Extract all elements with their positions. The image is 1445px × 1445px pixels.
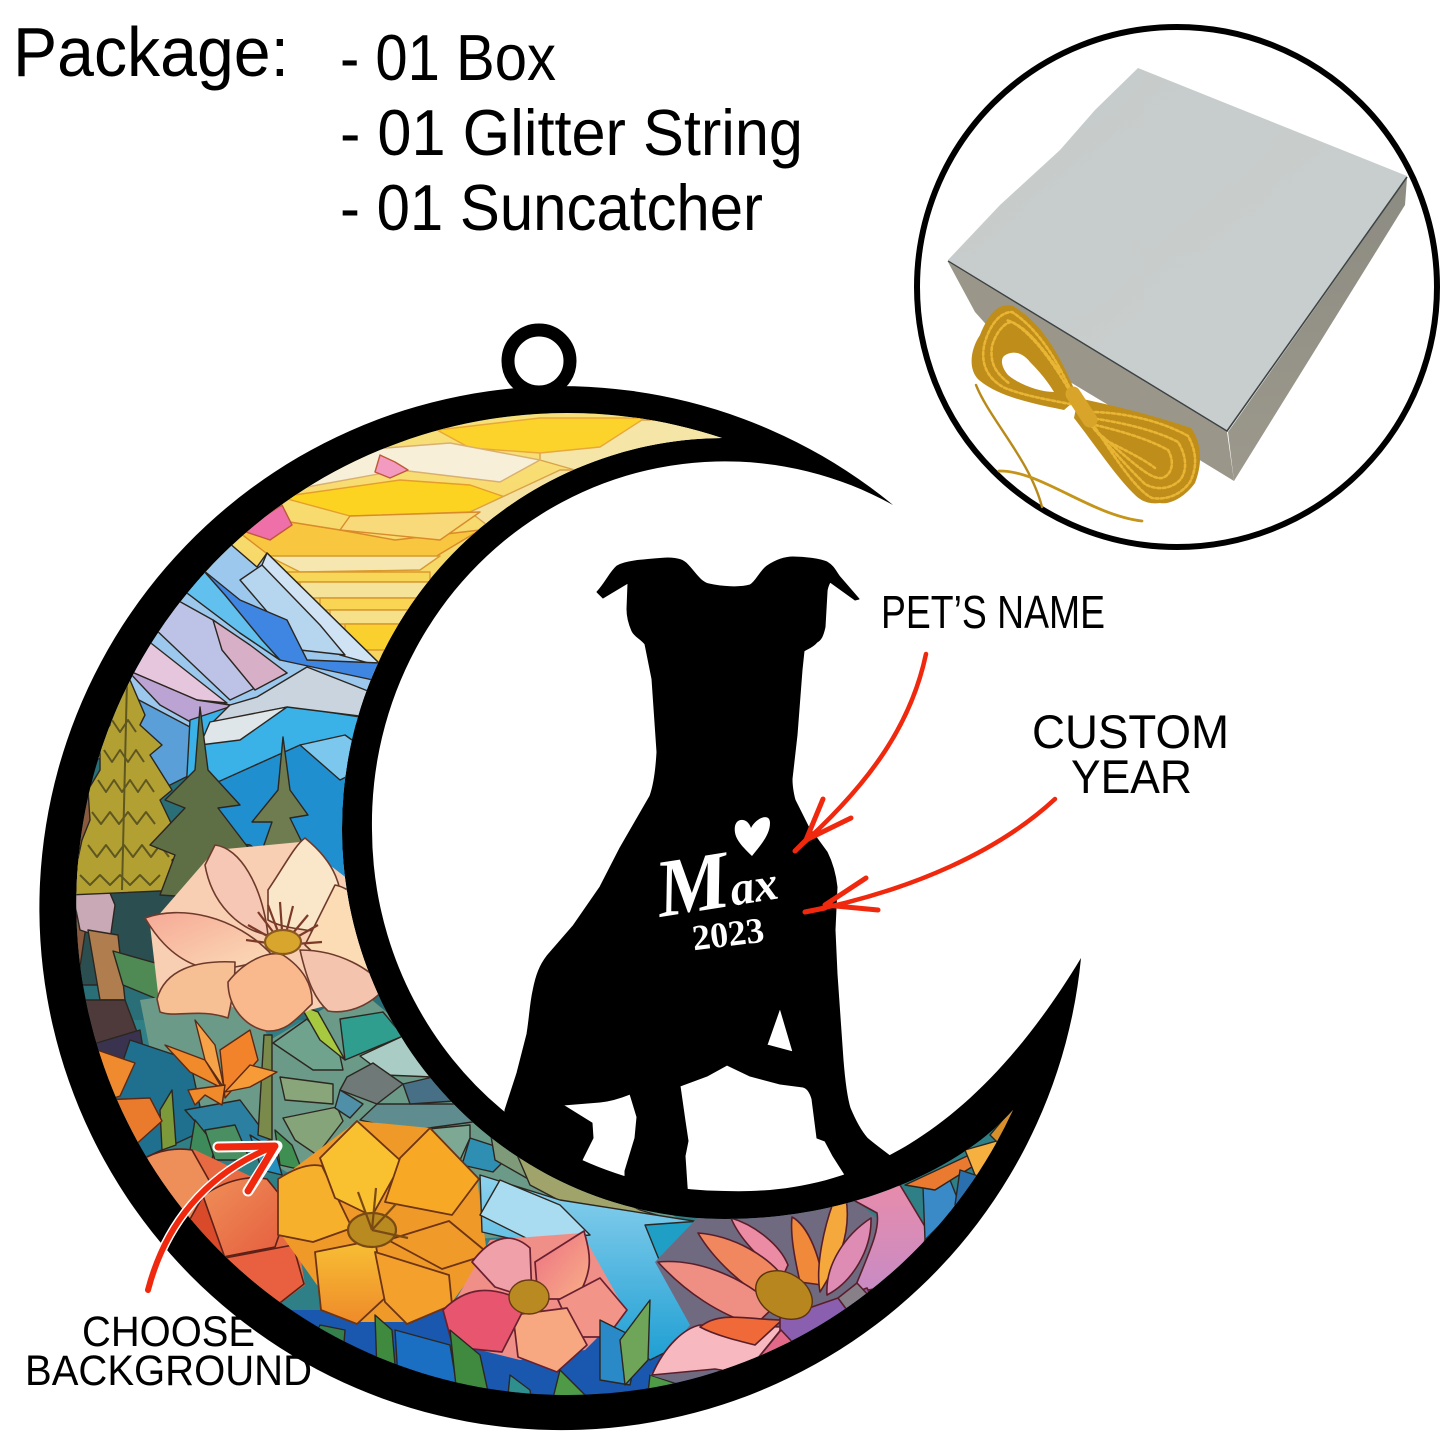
panel: box and glitter string in circle: [917, 27, 1437, 547]
suncatcher moon frame: [39, 386, 1081, 1430]
petal backing: [148, 1150, 305, 1303]
flower: left orange poppy: [98, 1050, 163, 1143]
dark forest floor: [76, 844, 254, 986]
box: lid: [948, 68, 1407, 430]
arrow: pet's name: [795, 654, 926, 851]
petal backing: [280, 1121, 487, 1322]
package contents list: - 01 Suncatcher: [340, 171, 763, 244]
label: pet's name: PET’S NAME: [881, 586, 1105, 638]
flower: big orange yellow: [278, 1121, 489, 1324]
label: custom year: [1032, 705, 1229, 803]
tree: pine near moon: [251, 736, 309, 846]
flower stamens: pale flower: [246, 902, 322, 954]
label: custom year: CUSTOM: [1032, 705, 1229, 758]
box: right side: [1228, 178, 1407, 481]
bottom foliage: [318, 1299, 676, 1395]
icon: heart: [735, 817, 770, 856]
label: choose background: BACKGROUND: [25, 1347, 312, 1395]
flower: lotus pink orange: [650, 1185, 930, 1390]
box: left side: [948, 262, 1234, 481]
petal backing: [150, 842, 377, 1013]
arrow: choose background: [148, 1146, 277, 1290]
rocks: [76, 790, 143, 1089]
package contents list: - 01 Box: [340, 21, 556, 94]
lotus backing: [650, 1200, 877, 1383]
flower stamens: orange flower: [348, 1188, 408, 1247]
flower: large pale peach: [145, 838, 385, 1031]
flower: coral left: [146, 1148, 305, 1303]
package contents list: - 01 Glitter String: [340, 96, 803, 169]
coil: loose tails: [976, 385, 1042, 507]
package contents list: [340, 21, 803, 244]
right tip glass: [904, 1110, 1013, 1242]
dog silhouette: [505, 557, 890, 1198]
coil: upper lobe: [972, 305, 1078, 410]
engraved year: 2023: 2023: [690, 910, 766, 958]
label: choose background: [25, 1308, 312, 1395]
label: custom year: YEAR: [1071, 750, 1192, 803]
coil: strand highlights: [983, 312, 1195, 498]
engraved name: Max: Max: [647, 826, 783, 935]
coil: lower lobe: [1074, 398, 1200, 503]
box: lid edges: [948, 177, 1407, 431]
petal backing: [450, 1233, 625, 1360]
mountains: [90, 542, 390, 900]
flower stamens: pink flower: [509, 1280, 549, 1314]
arrow: custom year: [805, 799, 1055, 912]
coil: knot: [1073, 394, 1090, 420]
sky: golden sunset: [200, 410, 740, 690]
water: [479, 1174, 695, 1361]
flower: pink: [443, 1231, 627, 1372]
title: Package: Package:: [13, 13, 289, 91]
flower: small orange lily: [165, 1020, 277, 1105]
stained glass background art: [76, 413, 1013, 1395]
leaves and stones mid band: [113, 951, 690, 1240]
tree: green pine: [150, 707, 250, 900]
label: choose background: CHOOSE: [82, 1308, 255, 1356]
base glass colour: [76, 413, 1013, 1395]
tree: yellow pine: [76, 680, 174, 896]
flower stamens: lotus: [755, 1270, 813, 1320]
foliage: stems and leaves: [110, 1035, 302, 1175]
pet name and year engraving: [647, 817, 783, 958]
hanger ring: [508, 330, 570, 392]
gold string coil: [972, 305, 1200, 521]
